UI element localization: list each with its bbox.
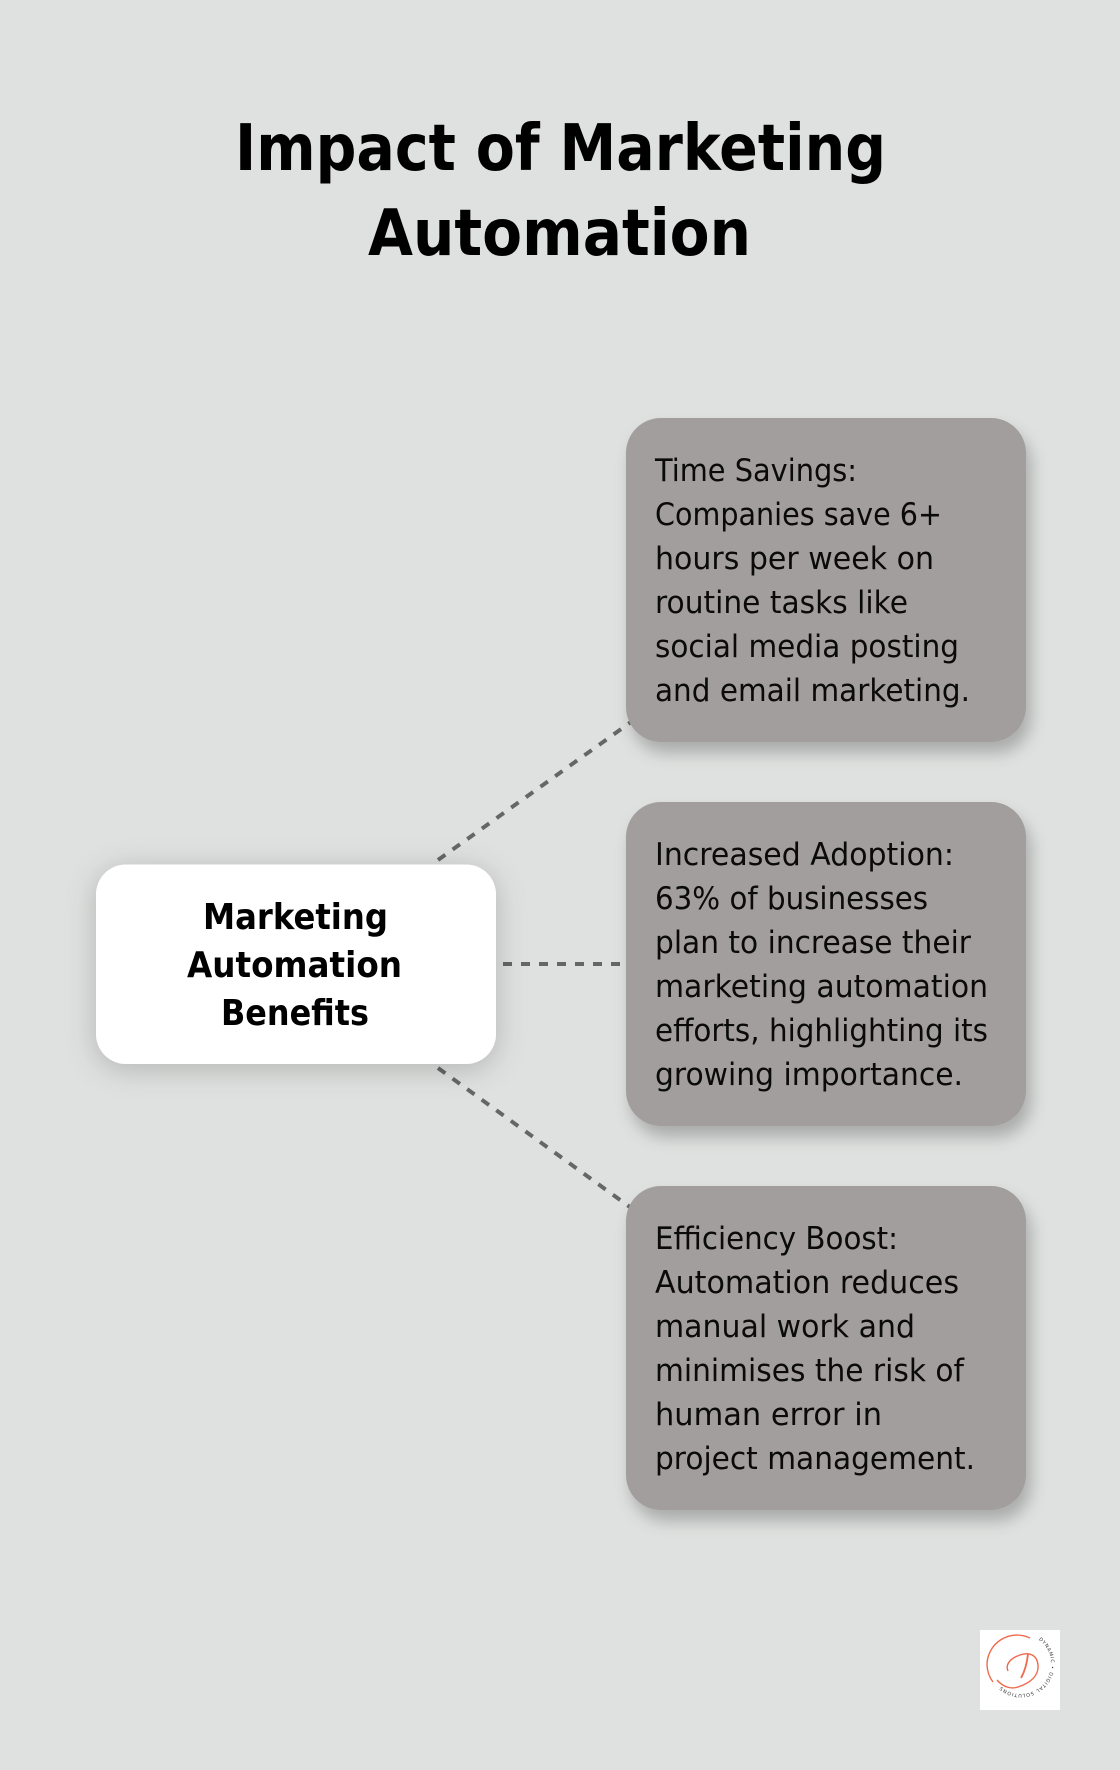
panel: efficiency boost: human error in xyxy=(655,1397,882,1433)
panel: efficiency boost xyxy=(626,1186,1026,1510)
title xyxy=(235,112,886,271)
title: Automation xyxy=(368,197,751,271)
panel: time savings: routine tasks like xyxy=(655,585,908,621)
panel: increased adoption: efforts, highlighting its xyxy=(655,1013,988,1049)
panel: increased adoption: 63% of businesses xyxy=(655,881,928,917)
panel: time savings: Companies save 6+ xyxy=(655,497,942,533)
panel: increased adoption: growing importance. xyxy=(655,1057,963,1093)
title: Impact of Marketing xyxy=(235,112,886,186)
panel: efficiency boost: Efficiency Boost: xyxy=(655,1221,898,1257)
icon: dynamic digital solutions logo xyxy=(980,1630,1060,1710)
panel: efficiency boost: manual work and xyxy=(655,1309,915,1345)
icon: dynamic digital solutions logo: DYNAMIC • DIGITAL SOLUTIONS xyxy=(1000,1637,1054,1698)
panel: marketing automation benefits: Benefits xyxy=(221,993,369,1034)
panel: efficiency boost: Automation reduces xyxy=(655,1265,959,1301)
panel: efficiency boost: minimises the risk of xyxy=(655,1353,965,1389)
panel: increased adoption: Increased Adoption: xyxy=(655,837,954,873)
panel: increased adoption: plan to increase their xyxy=(655,925,971,961)
panel: increased adoption: marketing automation xyxy=(655,969,988,1005)
dashed connector: centre to increased adoption xyxy=(503,962,645,966)
panel: time savings: hours per week on xyxy=(655,541,934,577)
panel: efficiency boost: project management. xyxy=(655,1441,975,1477)
dashed connector: centre to efficiency boost xyxy=(438,1068,645,1218)
panel: marketing automation benefits xyxy=(96,864,496,1064)
panel: time savings: Time Savings: xyxy=(654,453,857,489)
panel: time savings: and email marketing. xyxy=(655,673,970,709)
panel: increased adoption xyxy=(626,802,1026,1126)
dashed connector: centre to time savings xyxy=(438,712,645,860)
panel: time savings: social media posting xyxy=(655,629,959,665)
panel: time savings xyxy=(626,418,1026,742)
panel: marketing automation benefits: Marketing xyxy=(203,897,388,938)
panel: marketing automation benefits: Automation xyxy=(187,945,402,986)
